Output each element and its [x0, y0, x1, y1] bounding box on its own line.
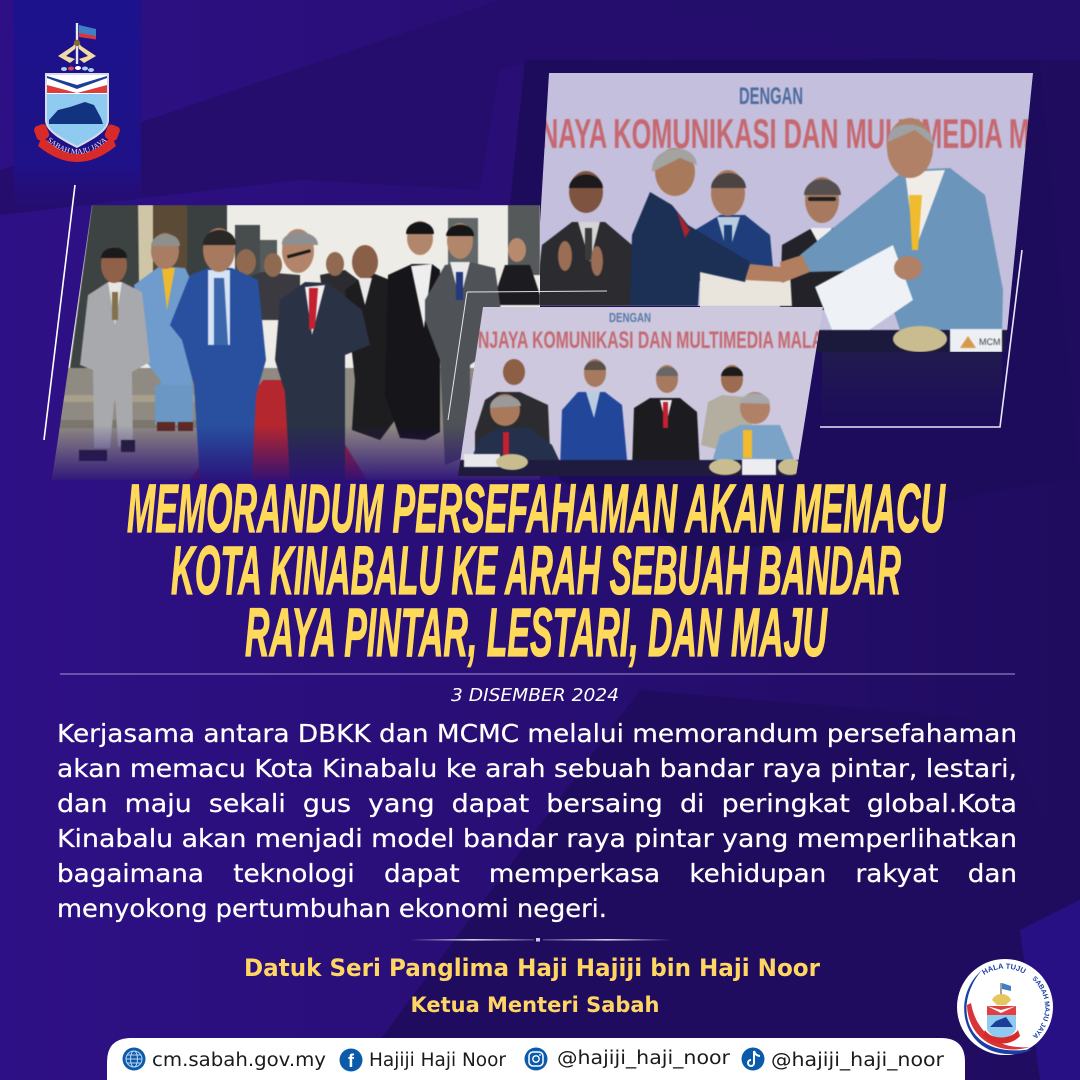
grey suit man [79, 247, 150, 461]
name: Datuk Seri Panglima Haji Hajiji bin Haji Noor [244, 954, 820, 982]
body paragraph: Kerjasama antara DBKK dan MCMC melalui memorandum persefahaman [57, 719, 1017, 748]
man with red tie right [779, 176, 845, 311]
sign MCMC: MCM [979, 337, 1000, 347]
icon: instagram [524, 1048, 548, 1070]
table [816, 329, 1008, 352]
flowers [893, 326, 947, 352]
round logo: Hala Tuju: SABAH MAJU JAYA [1032, 976, 1050, 1038]
photo: walking delegation [50, 205, 545, 482]
sign MCMC [950, 329, 1002, 352]
instagram handle: @hajiji_haji_noor [557, 1048, 730, 1069]
frame lines right photo [820, 250, 1022, 427]
grey suit man right [425, 223, 505, 465]
body paragraph: dan maju sekali gus yang dapat bersaing di peringkat global.Kota [57, 789, 1017, 818]
photo: group on stage: NJAYA KOMUNIKASI DAN MULTIMEDIA MALA [478, 327, 823, 354]
red carpet [190, 380, 367, 480]
logo: Sabah coat of arms [34, 23, 120, 162]
photo: group on stage [455, 305, 827, 478]
blue logo band [14, 0, 141, 210]
icon: globe [122, 1048, 146, 1070]
black suit man [385, 221, 440, 440]
background guests [236, 238, 540, 320]
body paragraph: bagaimana teknologi dapat memperkasa kehidupan rakyat dan [57, 859, 1017, 888]
body paragraph: Kinabalu akan menjadi model bandar raya pintar yang memperlihatkan [57, 824, 1017, 853]
title [127, 470, 946, 671]
man clapping [535, 171, 632, 306]
body paragraph [57, 719, 1017, 923]
round logo: Hala Tuju [957, 959, 1053, 1055]
signed document [814, 244, 914, 330]
photo: group on stage: DENGAN [609, 310, 651, 325]
social media bar [107, 1038, 965, 1080]
small divider [410, 938, 671, 942]
light blue suit man [780, 118, 1003, 332]
body paragraph: akan memacu Kota Kinabalu ke arah sebuah bandar raya pintar, lestari, [57, 754, 1017, 783]
website: cm.sabah.gov.my [152, 1050, 326, 1071]
frame lines left photo [44, 185, 330, 440]
light blue suit man [134, 233, 196, 431]
logo: Sabah coat of arms: SABAH MAJU JAYA [48, 138, 107, 154]
date: 3 DISEMBER 2024 [451, 686, 619, 706]
blue suit chief minister [170, 228, 266, 480]
icon: facebook: f [348, 1051, 355, 1071]
photo: signing handshake: DENGAN [739, 83, 803, 110]
facebook name: Hajiji Haji Noor [369, 1050, 506, 1071]
position: Ketua Menteri Sabah [410, 993, 660, 1017]
navy suit man with red tie [275, 229, 370, 480]
divider [60, 673, 1015, 675]
seated and standing figures [470, 359, 795, 470]
inner frame accent lines [448, 291, 607, 420]
body paragraph: menyokong pertumbuhan ekonomi negeri. [57, 894, 607, 923]
tiktok handle: @hajiji_haji_noor [771, 1050, 944, 1071]
round logo: Hala Tuju: HALA TUJU [982, 964, 1026, 975]
icon: tiktok [742, 1048, 764, 1070]
man behind, blue suit [695, 169, 774, 282]
dark suit man back [345, 245, 395, 440]
photo: signing handshake [530, 70, 1040, 360]
document behind [700, 272, 792, 306]
navy suit man [630, 148, 790, 306]
icon: facebook [340, 1048, 362, 1072]
